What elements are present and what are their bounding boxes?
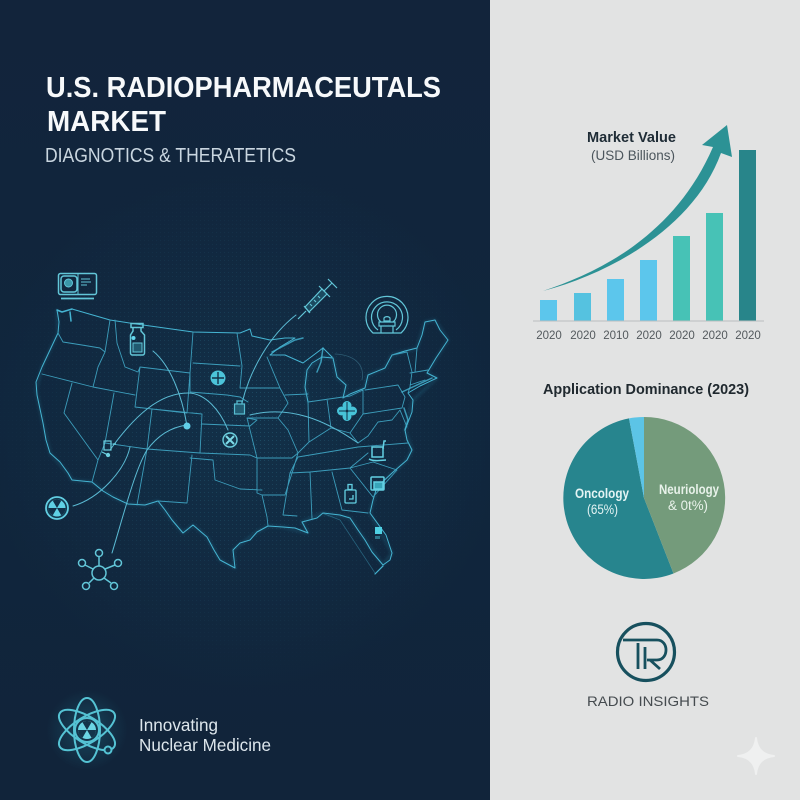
year labels: 2020 <box>702 330 728 342</box>
icon: Florida marker <box>375 527 382 539</box>
logo: R mark <box>618 624 674 680</box>
year labels: 2020 <box>536 330 562 342</box>
neurology label: & 0t%) <box>668 498 708 513</box>
title second line: MARKET <box>47 106 166 138</box>
neurology label <box>659 482 719 513</box>
footer emblem: atom <box>47 690 127 770</box>
panel: light right background <box>490 0 800 800</box>
logo wordmark: RADIO INSIGHTS <box>587 693 709 709</box>
connector arcs <box>153 351 187 426</box>
panel: dark left background <box>0 0 490 800</box>
footer tagline: Nuclear Medicine <box>139 735 271 755</box>
title: U.S. RADIOPHARMACEUTALS <box>46 72 441 104</box>
slice: neurology <box>644 417 725 574</box>
slice: oncology <box>563 418 674 579</box>
oncology label <box>575 486 629 517</box>
pie chart: application dominance <box>563 417 725 579</box>
year labels: 2020 <box>636 330 662 342</box>
footer tagline: Innovating <box>139 715 218 735</box>
map glow <box>36 310 448 568</box>
northern border <box>72 309 332 363</box>
oncology label: (65%) <box>587 502 618 517</box>
growth arrow <box>543 125 732 291</box>
year labels <box>536 330 761 342</box>
icon: South Carolina marker <box>371 477 384 490</box>
icon: syringe <box>298 279 337 319</box>
icon: North Carolina marker <box>369 441 386 461</box>
chart heading: Market Value <box>587 130 676 146</box>
year labels: 2010 <box>603 330 629 342</box>
icon: round badge <box>210 370 226 386</box>
year labels: 2020 <box>570 330 596 342</box>
axis <box>533 320 764 322</box>
icon: vial <box>130 324 144 355</box>
year labels: 2020 <box>669 330 695 342</box>
hub dot <box>184 422 190 430</box>
bar chart: market value <box>533 125 764 342</box>
neurology label: Neuriology <box>659 482 719 497</box>
icon: radiation <box>46 497 68 519</box>
icon: clover <box>337 401 357 421</box>
pie chart heading: Application Dominance (2023) <box>543 382 749 398</box>
bars <box>540 150 756 321</box>
icon: small case <box>234 401 244 414</box>
icon: cross circle <box>223 433 237 447</box>
map outline <box>36 310 448 568</box>
icon: sparkle <box>738 738 774 774</box>
icon: Georgia marker <box>345 484 356 503</box>
state borders <box>42 320 428 526</box>
subtitle: DIAGNOTICS & THERATETICS <box>45 145 296 167</box>
slice: other <box>629 417 644 498</box>
footer tagline <box>139 715 271 755</box>
chart unit: (USD Billions) <box>591 147 675 163</box>
icon: Utah marker <box>102 441 116 456</box>
icon: MRI scanner <box>366 296 408 333</box>
icon: molecule <box>78 550 122 590</box>
year labels: 2020 <box>735 330 761 342</box>
icon: monitor <box>58 274 96 298</box>
US network map <box>36 309 448 574</box>
oncology label: Oncology <box>575 486 629 501</box>
